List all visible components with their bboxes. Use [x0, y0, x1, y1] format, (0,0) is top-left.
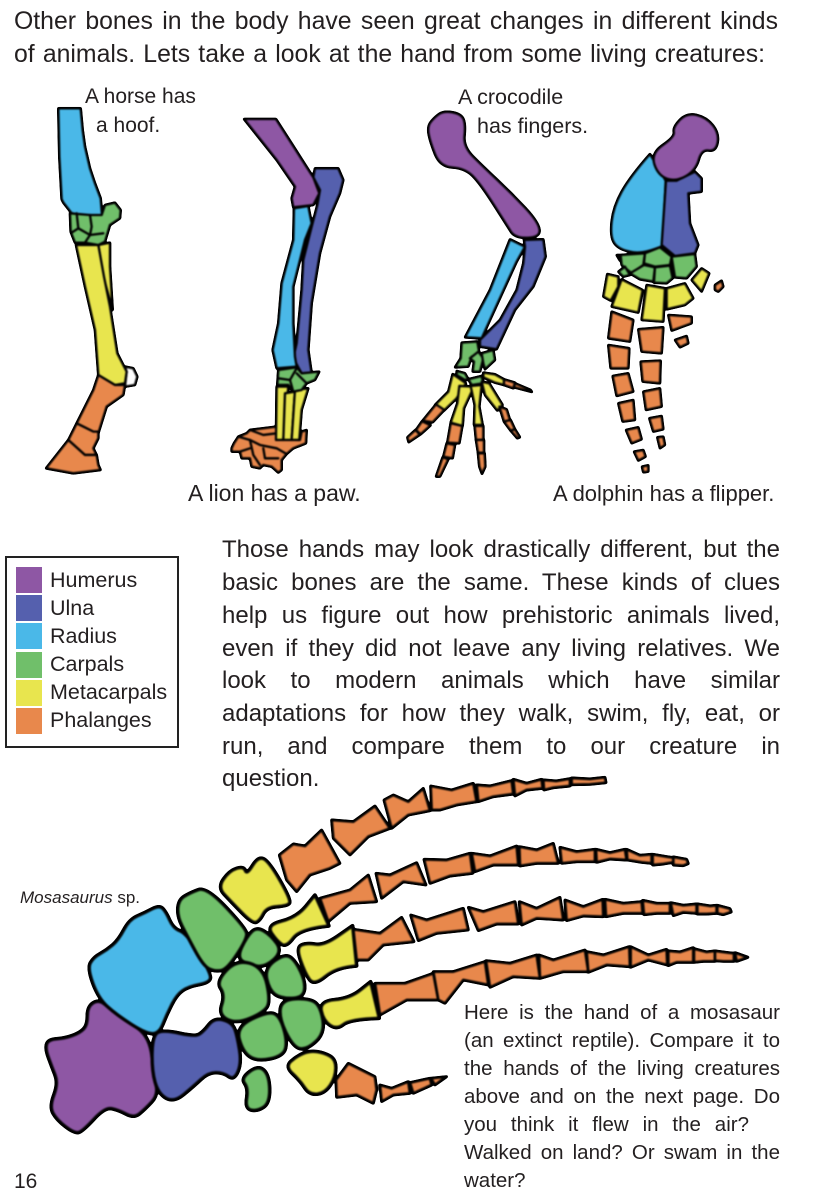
- digit row 3: [353, 897, 731, 960]
- caption: crocodile: has fingers.: [477, 114, 588, 138]
- mosasaur paragraph: the hands of the living creatures: [464, 1057, 780, 1080]
- mosasaur paragraph: [464, 1001, 780, 1192]
- legend: [5, 556, 179, 748]
- dolphin metacarpals: [603, 268, 709, 322]
- main paragraph: adaptations for how they walk, swim, fly, eat, or: [222, 700, 780, 727]
- legend: Humerus: [50, 568, 137, 592]
- legend: humerus: [16, 567, 137, 593]
- legend: Metacarpals: [50, 680, 167, 704]
- mosasaur humerus: [46, 1001, 157, 1133]
- dolphin carpals: [617, 247, 697, 283]
- lion ulna: [293, 168, 343, 373]
- legend: metacarpals: [16, 680, 167, 706]
- main paragraph: run, and compare them to our creature in: [222, 733, 780, 760]
- legend: ulna: [16, 595, 94, 621]
- crocodile phalanges: [407, 379, 532, 477]
- lion paw phalanges: [232, 427, 307, 473]
- main paragraph: even if they did not leave any living relatives. We: [222, 635, 780, 662]
- horse radius: [58, 108, 102, 216]
- mosasaur paragraph: you think it flew in the air?: [464, 1113, 749, 1136]
- horse sesamoid: [125, 367, 137, 387]
- crocodile forelimb: [407, 112, 546, 477]
- mosasaur hand: [46, 777, 748, 1133]
- legend: phalanges: [16, 708, 152, 734]
- legend: carpals: [16, 652, 124, 678]
- mosasaur fifth digit start: [336, 1063, 447, 1103]
- legend: Radius: [50, 624, 117, 648]
- lion metacarpals: [276, 387, 308, 440]
- main paragraph: look to modern animals which have similar: [222, 667, 780, 694]
- mosasaur radius: [89, 907, 211, 1034]
- caption: horse: A horse has: [85, 85, 196, 108]
- mosasaur phalanges: [320, 777, 748, 1015]
- legend: radius: [16, 623, 117, 649]
- horse forelimb: [46, 108, 137, 473]
- main paragraph: question.: [222, 765, 319, 792]
- dolphin radius: [611, 154, 666, 253]
- caption: horse: [85, 85, 196, 137]
- crocodile ulna: [480, 239, 546, 349]
- mosasaur first digit base: [279, 830, 340, 892]
- horse metacarpal: [76, 245, 127, 385]
- mosasaur paragraph: above and on the next page. Do: [464, 1085, 780, 1108]
- mosasaur carpals: [178, 889, 323, 1110]
- main paragraph: Those hands may look drastically different, but the: [222, 536, 780, 563]
- page number: 16: [14, 1170, 37, 1193]
- intro text: Other bones in the body have seen great changes in different kinds: [14, 8, 778, 35]
- horse carpals: [70, 203, 121, 245]
- crocodile radius: [465, 239, 525, 338]
- mosasaur paragraph: water?: [464, 1169, 526, 1192]
- mosasaur metacarpals: [221, 858, 379, 1094]
- mosasaur ulna: [152, 1019, 240, 1100]
- lion humerus: [244, 119, 319, 207]
- horse phalanges: [46, 375, 125, 473]
- digit row 2: [320, 843, 688, 922]
- dolphin phalanges: [608, 281, 723, 472]
- dolphin flipper: [603, 114, 723, 472]
- mosasaur paragraph: (an extinct reptile). Compare it to: [464, 1029, 780, 1052]
- mosasaur arm and wrist: [46, 830, 447, 1133]
- dolphin ulna: [662, 172, 702, 256]
- main paragraph: help us figure out how prehistoric animals lived,: [222, 602, 780, 629]
- main paragraph: basic bones are the same. These kinds of clues: [222, 569, 780, 596]
- caption: lion: A lion has a paw.: [188, 480, 361, 506]
- horse splint: [98, 243, 113, 310]
- crocodile metacarpals: [435, 373, 504, 426]
- mosasaur paragraph: Here is the hand of a mosasaur: [464, 1001, 780, 1024]
- dolphin humerus: [654, 114, 718, 180]
- caption: crocodile: [458, 85, 588, 138]
- caption: crocodile: A crocodile: [458, 85, 563, 109]
- legend: Carpals: [50, 652, 124, 676]
- lion forelimb: [232, 119, 343, 473]
- intro text: [14, 8, 778, 68]
- legend: Phalanges: [50, 708, 152, 732]
- digit row 4: [375, 947, 748, 1015]
- intro text: of animals. Lets take a look at the hand from some living creatures:: [14, 41, 765, 68]
- main paragraph: [222, 536, 780, 792]
- crocodile humerus: [428, 112, 540, 238]
- mosasaur paragraph: Walked on land? Or swam in the: [464, 1141, 780, 1164]
- caption: dolphin: A dolphin has a flipper.: [553, 481, 774, 506]
- species label: Mosasaurus sp.: [20, 888, 140, 907]
- legend: Ulna: [50, 596, 94, 620]
- caption: horse: a hoof.: [96, 114, 160, 137]
- lion carpals: [277, 367, 319, 392]
- digit row 1: [332, 777, 606, 855]
- crocodile carpals: [455, 342, 495, 385]
- lion radius: [273, 206, 312, 368]
